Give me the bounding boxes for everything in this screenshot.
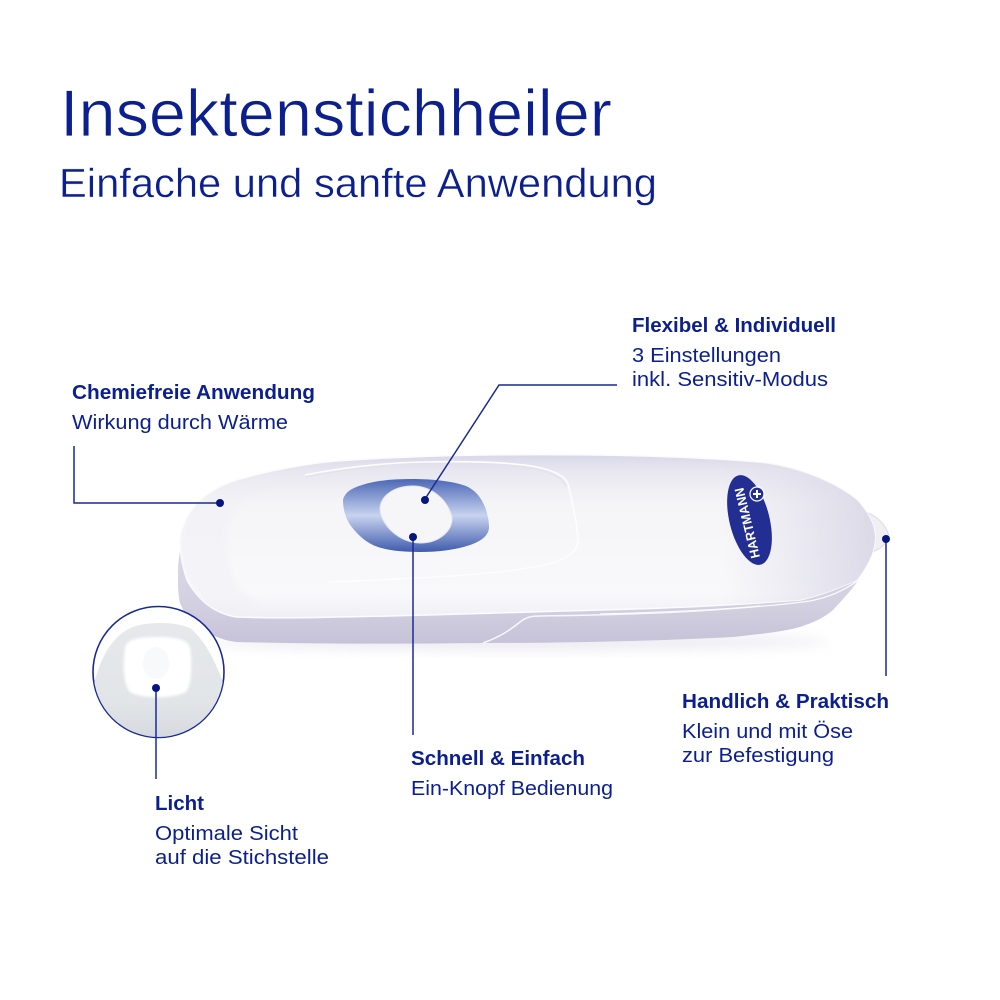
ground shadow — [210, 634, 830, 650]
callout: Flexibel & Individuell — [421, 315, 836, 504]
callout: Chemiefreie Anwendung — [72, 382, 315, 507]
title: Insektenstichheiler — [60, 76, 612, 150]
logo: Hartmann: HARTMANN — [732, 486, 763, 560]
logo: Hartmann — [719, 471, 780, 569]
callout: Handlich & Praktisch: zur Befestigung — [682, 745, 834, 767]
callout: Chemiefreie Anwendung: Chemiefreie Anwendung — [72, 382, 315, 404]
callout: Flexibel & Individuell: inkl. Sensitiv-Modus — [632, 369, 828, 391]
subtitle: Einfache und sanfte Anwendung — [59, 160, 657, 206]
device top face — [180, 455, 875, 618]
callout: Schnell & Einfach: Schnell & Einfach — [411, 748, 585, 770]
callout: Chemiefreie Anwendung: Wirkung durch Wärme — [72, 412, 288, 434]
callout: Handlich & Praktisch: Klein und mit Öse — [682, 721, 853, 743]
callout: Licht: Licht — [155, 793, 204, 815]
inset: light detail — [92, 606, 226, 745]
button: blue surround — [343, 479, 489, 552]
callout: Licht: Optimale Sicht — [155, 823, 298, 845]
product: insect bite healer device — [178, 450, 889, 650]
eyelet — [868, 513, 889, 553]
lower shell — [178, 500, 870, 644]
callout: Flexibel & Individuell: 3 Einstellungen — [632, 345, 781, 367]
callout: Licht — [152, 684, 329, 869]
callout: Handlich & Praktisch: Handlich & Praktisch — [682, 691, 889, 713]
callout: Handlich & Praktisch — [682, 535, 890, 767]
seam detail — [483, 606, 760, 643]
callout: Schnell & Einfach: Ein-Knopf Bedienung — [411, 778, 613, 800]
callout: Licht: auf die Stichstelle — [155, 847, 329, 869]
callout: Flexibel & Individuell: Flexibel & Individuell — [632, 315, 836, 337]
callout: Schnell & Einfach — [409, 533, 613, 800]
button: white centre — [380, 486, 452, 543]
recessed panel outline — [305, 462, 578, 582]
